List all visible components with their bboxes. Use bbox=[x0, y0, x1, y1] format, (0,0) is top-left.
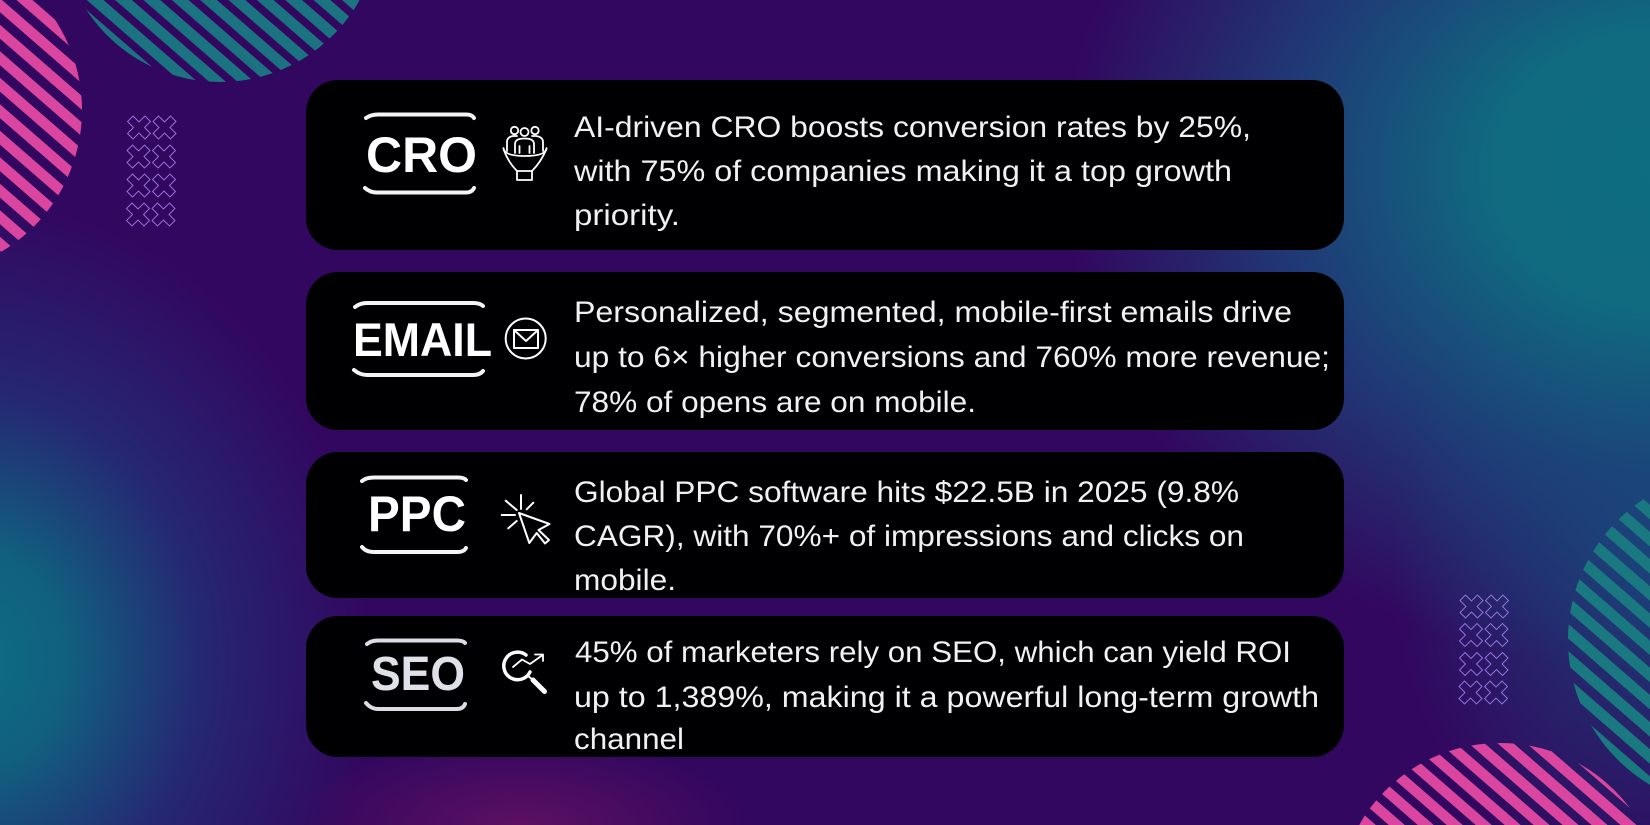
body text: EMAIL: Personalized, segmented, mobile-first emails drive bbox=[574, 296, 1292, 329]
heading: CRO: CRO bbox=[366, 127, 477, 183]
body text: CRO: priority. bbox=[574, 199, 680, 232]
heading: EMAIL: EMAIL bbox=[353, 313, 492, 366]
body text: SEO: 45% of marketers rely on SEO, which can yield ROI bbox=[575, 636, 1291, 669]
body text: PPC: CAGR), with 70%+ of impressions and clicks on bbox=[574, 520, 1244, 553]
panel: EMAIL bbox=[306, 272, 1344, 430]
body text: SEO: channel bbox=[574, 723, 684, 756]
decorative circle: pink stripes bottom-right bbox=[1359, 743, 1641, 825]
heading: PPC: PPC bbox=[368, 486, 466, 542]
body text: SEO: up to 1,389%, making it a powerful long-term growth bbox=[574, 681, 1319, 714]
icon: people in funnel bbox=[504, 127, 546, 180]
heading: PPC bbox=[362, 478, 466, 552]
body text: EMAIL: up to 6× higher conversions and 760% more revenue; bbox=[574, 341, 1330, 374]
heading: SEO: SEO bbox=[371, 648, 465, 701]
cross pattern: left bbox=[126, 116, 176, 226]
body text: CRO: with 75% of companies making it a top growth bbox=[573, 155, 1232, 188]
panel: PPC bbox=[306, 452, 1344, 598]
icon: magnifier with growth arrow bbox=[504, 652, 544, 692]
decorative circle: teal stripes right bbox=[1568, 495, 1650, 785]
body text: CRO: AI-driven CRO boosts conversion rates by 25%, bbox=[574, 111, 1251, 144]
decorative circle: pink stripes top-left bbox=[0, 0, 82, 253]
body text: EMAIL: 78% of opens are on mobile. bbox=[574, 386, 976, 419]
decorative circle: teal stripes top bbox=[80, 0, 360, 82]
icon: envelope in circle bbox=[506, 318, 546, 358]
body text: PPC: Global PPC software hits $22.5B in 2025 (9.8% bbox=[574, 476, 1239, 509]
panel: CRO bbox=[306, 80, 1344, 250]
cross pattern: right bbox=[1459, 595, 1508, 704]
heading: SEO bbox=[366, 640, 465, 709]
icon: click cursor bbox=[502, 495, 550, 544]
body text: PPC: mobile. bbox=[574, 564, 676, 597]
panel: SEO bbox=[306, 616, 1344, 757]
